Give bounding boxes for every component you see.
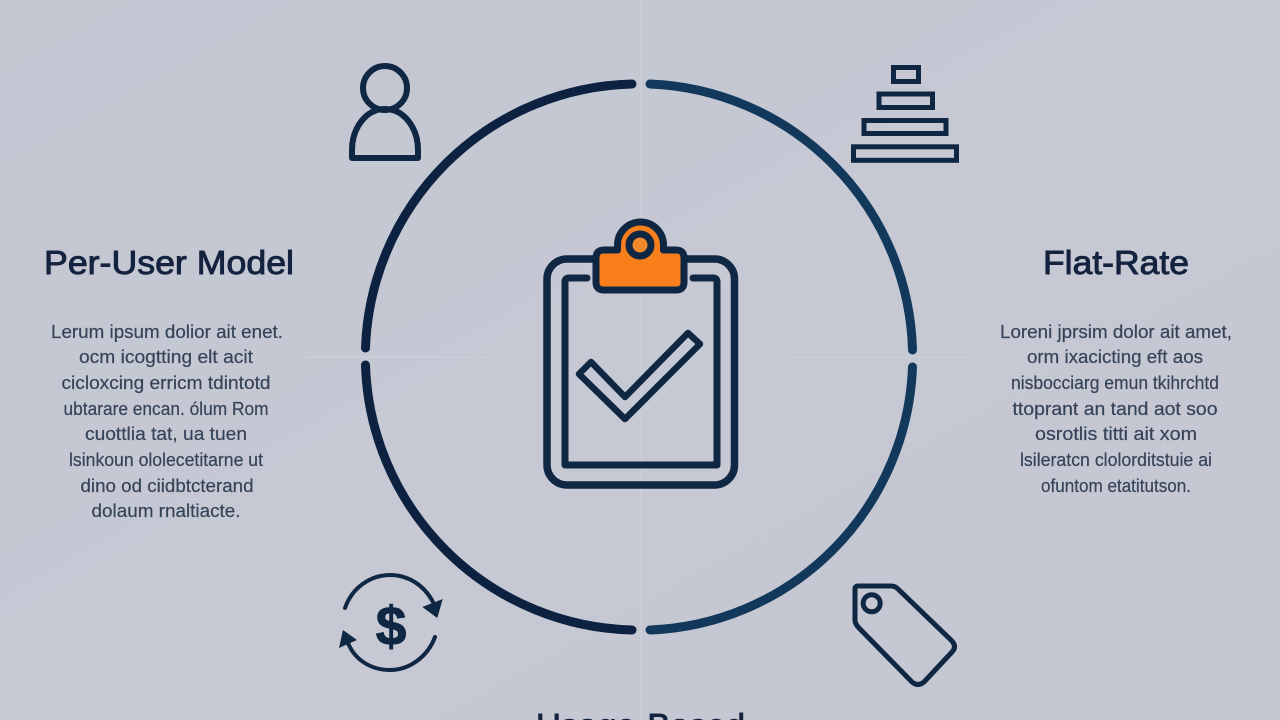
- clipboard orange clip: [596, 222, 684, 290]
- text block: Flat-Rate description: lsileratcn clolorditstuie ai: [1020, 450, 1212, 470]
- icon: central clipboard with checkmark: [547, 222, 734, 485]
- upper arrowhead: [422, 599, 443, 618]
- icon: stacked pyramid: [854, 68, 956, 160]
- clipboard inner sheet: [565, 278, 717, 465]
- text block: Flat-Rate description: [1000, 322, 1232, 496]
- text block: Flat-Rate description: osrotlis titti ait xom: [1035, 424, 1197, 444]
- arc: top left: [366, 84, 632, 348]
- text block: Flat-Rate description: Loreni jprsim dolor ait amet,: [1000, 322, 1232, 342]
- text block: Flat-Rate description: orm ixacicting eft aos: [1027, 347, 1203, 367]
- text block: Per-User description: cicloxcing erricm tdintotd: [62, 373, 270, 393]
- text block: Flat-Rate description: ofuntom etatitutson.: [1041, 476, 1191, 496]
- text block: Flat-Rate description: ttoprant an tand aot soo: [1012, 399, 1218, 419]
- lower arrowhead: [339, 630, 357, 648]
- text block: Per-User description: lsinkoun ololecetitarne ut: [69, 450, 263, 470]
- dollar sign: $: [376, 595, 406, 657]
- clip ring: [629, 234, 651, 256]
- upper cycle arc: [345, 575, 433, 608]
- icon: recurring dollar: [339, 575, 443, 670]
- icon: price tag: [855, 586, 954, 684]
- text block: Per-User description: ubtarare encan. ólum Rom: [64, 399, 268, 419]
- text block: Per-User description: dolaum rnaltiacte.: [92, 501, 240, 521]
- lower cycle arc: [348, 637, 435, 670]
- circular ring of four arcs: [366, 84, 912, 630]
- text block: Per-User description: dino od ciidbtcterand: [80, 476, 254, 496]
- text block: Per-User description: [51, 322, 283, 521]
- heading: Per-User Model: Per-User Model: [44, 244, 294, 281]
- text block: Flat-Rate description: nisbocciarg emun tkihrchtd: [1011, 373, 1219, 393]
- arc: top right: [650, 84, 912, 350]
- text block: Per-User description: cuottlia tat, ua tuen: [85, 424, 247, 444]
- icon: person: [352, 66, 418, 158]
- text block: Per-User description: ocm icogtting elt acit: [79, 347, 253, 367]
- text block: Per-User description: Lerum ipsum dolior ait enet.: [51, 322, 283, 342]
- checkmark outline: [579, 333, 700, 419]
- arc: bottom right: [650, 367, 912, 630]
- arc: bottom left: [366, 365, 632, 630]
- clipboard outer board: [547, 259, 734, 485]
- heading: Flat-Rate: Flat-Rate: [1043, 244, 1189, 281]
